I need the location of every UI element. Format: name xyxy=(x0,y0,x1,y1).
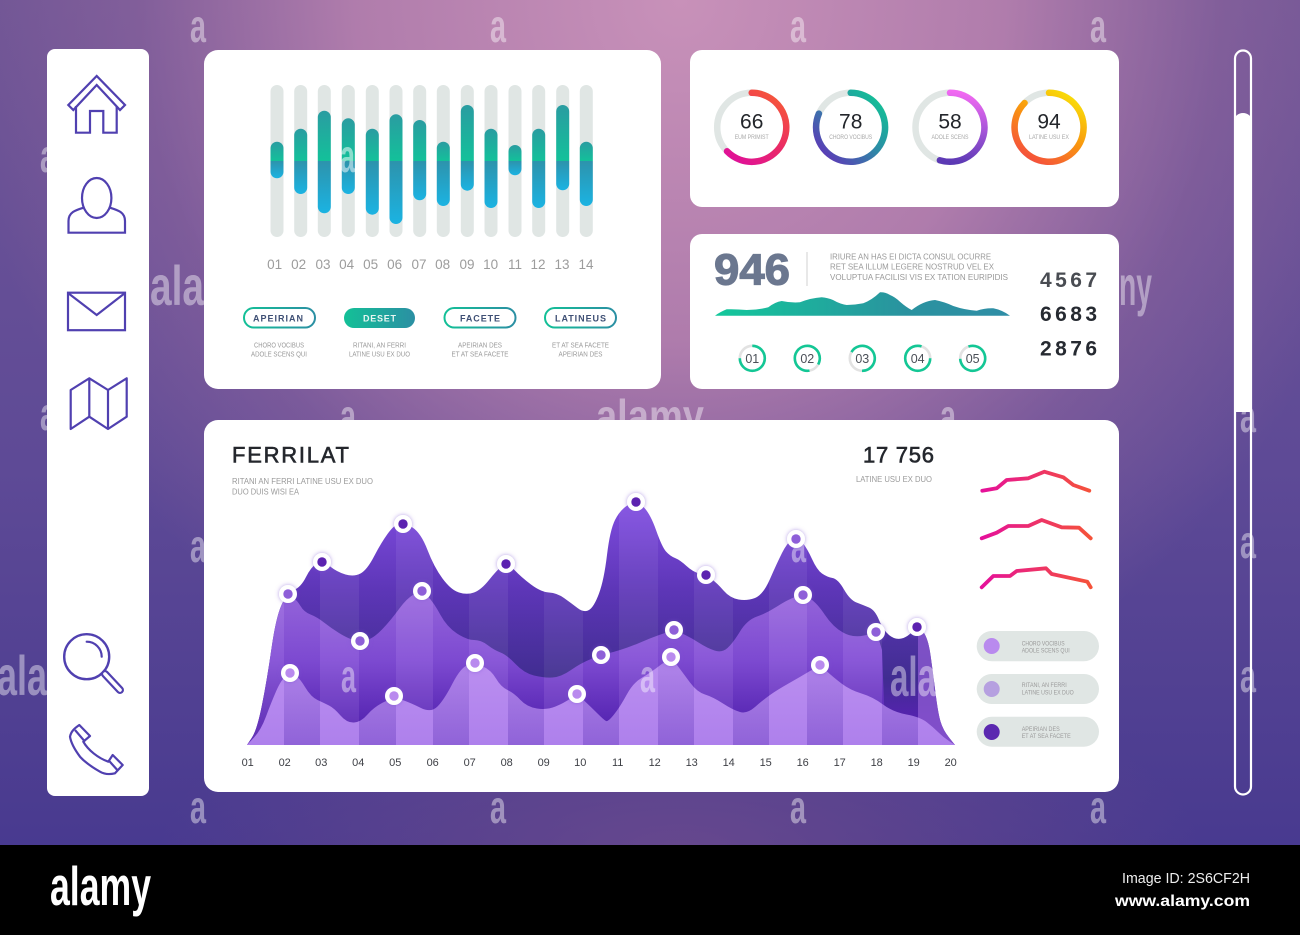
data points middle series xyxy=(279,582,885,664)
icon: user xyxy=(68,178,125,233)
divider xyxy=(806,252,808,286)
gauge 78 xyxy=(816,93,885,162)
stock footer bar xyxy=(0,845,1300,935)
bar axis labels: 09 xyxy=(459,257,475,272)
footer image id: Image ID: 2S6CF2H xyxy=(1122,870,1250,887)
bar axis labels: 10 xyxy=(483,257,498,272)
gauge 66: 66 xyxy=(740,110,763,134)
background watermarks: a xyxy=(490,0,506,52)
background watermarks: a xyxy=(940,390,956,442)
scrollbar xyxy=(1234,50,1252,794)
gauge 58: ADOLE SCENS xyxy=(932,135,968,141)
filter buttons: DESET xyxy=(363,314,396,324)
heading description xyxy=(232,476,373,496)
filter buttons: LATINEUS xyxy=(555,314,606,324)
chart x axis labels: 17 xyxy=(834,757,846,769)
button captions: ADOLE SCENS QUI xyxy=(251,352,307,358)
big number 946: 946 xyxy=(714,246,790,294)
bar axis labels: 02 xyxy=(291,257,306,272)
side numbers xyxy=(1040,269,1097,360)
panel: donut gauges xyxy=(690,50,1119,207)
bar axis labels: 05 xyxy=(363,257,378,272)
description text: RET SEA ILLUM LEGERE NOSTRUD VEL EX xyxy=(830,262,994,272)
bar watermark: a xyxy=(340,130,355,182)
chart x axis labels: 20 xyxy=(945,757,957,769)
background watermarks: a xyxy=(1090,0,1106,52)
background watermarks: a xyxy=(190,781,206,833)
gauge 66: EUM PRIMIST xyxy=(735,135,769,141)
gauge 78: 78 xyxy=(839,110,862,134)
bars lower segments xyxy=(270,161,593,224)
chart x axis labels: 11 xyxy=(612,757,623,769)
bar axis labels xyxy=(267,257,594,272)
chart x axis labels: 02 xyxy=(279,757,291,769)
chart x axis labels: 12 xyxy=(649,757,661,769)
side numbers: 4567 xyxy=(1040,269,1097,292)
background watermarks: a xyxy=(1240,516,1256,568)
data points back series xyxy=(313,493,926,636)
chart x axis labels: 03 xyxy=(315,757,327,769)
chart x axis labels: 04 xyxy=(352,757,364,769)
layered area chart xyxy=(247,490,955,745)
chart watermarks: ala xyxy=(890,645,936,708)
legend pills: ADOLE SCENS QUI xyxy=(1022,649,1070,655)
button captions: RITANI, AN FERRI xyxy=(353,342,406,350)
background watermarks: a xyxy=(1090,781,1106,833)
legend pills: CHORO VOCIBUS xyxy=(1022,642,1065,648)
chart x axis labels: 14 xyxy=(723,757,735,769)
sparklines xyxy=(982,472,1091,587)
data points front series xyxy=(281,648,829,705)
button captions: APEIRIAN DES xyxy=(458,342,502,350)
background watermarks: a xyxy=(40,388,56,440)
background watermarks: ny xyxy=(1119,254,1152,317)
panel: stats summary xyxy=(690,234,1119,389)
button captions: LATINE USU EX DUO xyxy=(349,352,410,358)
icon: search xyxy=(64,634,120,690)
button captions: CHORO VOCIBUS xyxy=(254,342,304,350)
background watermarks: a xyxy=(40,130,56,182)
bar axis labels: 08 xyxy=(435,257,450,272)
button captions xyxy=(251,342,609,358)
icon: phone xyxy=(70,725,123,774)
chart x axis labels: 05 xyxy=(389,757,401,769)
gauge 94: LATINE USU EX xyxy=(1029,135,1069,141)
background watermarks: a xyxy=(190,0,206,52)
chart watermarks: a xyxy=(791,520,806,572)
bar axis labels: 06 xyxy=(387,257,402,272)
chart x axis labels: 19 xyxy=(908,757,920,769)
background watermarks: alamy xyxy=(596,390,704,442)
filter buttons: APEIRIAN xyxy=(253,314,303,324)
background watermarks: a xyxy=(790,781,806,833)
legend pills xyxy=(977,631,1099,747)
footer logo: alamy xyxy=(50,855,151,917)
button captions: ET AT SEA FACETE xyxy=(452,352,509,358)
bar tracks xyxy=(270,85,593,237)
ring labels: 04 xyxy=(911,352,925,366)
panel: bar chart xyxy=(204,50,661,389)
description text xyxy=(830,252,1008,282)
bar axis labels: 03 xyxy=(315,257,331,272)
background watermarks: a xyxy=(190,520,206,572)
legend pills: APEIRIAN DES xyxy=(1022,727,1060,733)
chart x axis labels: 01 xyxy=(242,757,254,769)
chart x axis labels: 10 xyxy=(574,757,586,769)
chart x axis labels: 15 xyxy=(760,757,772,769)
total value: 17 756 xyxy=(863,442,934,468)
bar axis labels: 14 xyxy=(578,257,594,272)
heading: FERRILAT xyxy=(232,442,349,468)
background watermarks: a xyxy=(1240,390,1256,442)
chart x axis labels: 13 xyxy=(686,757,698,769)
ring labels xyxy=(745,352,980,366)
background watermarks: a xyxy=(490,781,506,833)
chart watermarks: a xyxy=(341,650,356,702)
ring labels: 05 xyxy=(966,352,980,366)
filter buttons xyxy=(244,308,616,328)
background watermarks: ala xyxy=(150,254,205,317)
panel: area chart xyxy=(204,420,1119,792)
chart x axis labels xyxy=(242,757,957,769)
chart x axis labels: 06 xyxy=(427,757,439,769)
bar axis labels: 01 xyxy=(267,257,282,272)
gauge 94 xyxy=(1014,93,1084,162)
gauge 58: 58 xyxy=(938,110,962,134)
bar axis labels: 12 xyxy=(530,257,546,272)
chart x axis labels: 09 xyxy=(538,757,550,769)
ring labels: 03 xyxy=(855,352,869,366)
heading description: DUO DUIS WISI EA xyxy=(232,486,299,496)
total caption: LATINE USU EX DUO xyxy=(856,474,932,484)
gauge 78: CHORO VOCIBUS xyxy=(829,135,872,141)
bar axis labels: 13 xyxy=(554,257,570,272)
legend pills: LATINE USU EX DUO xyxy=(1022,690,1074,696)
bars upper segments xyxy=(270,105,593,161)
filter buttons: FACETE xyxy=(460,314,500,324)
chart watermarks: a xyxy=(640,650,655,702)
side numbers: 2876 xyxy=(1040,338,1097,360)
legend pills: ET AT SEA FACETE xyxy=(1022,734,1071,740)
bar axis labels: 04 xyxy=(339,257,355,272)
gauge 58 xyxy=(916,93,984,162)
background watermarks: a xyxy=(790,0,806,52)
background watermarks: a xyxy=(1240,650,1256,702)
gauge 94: 94 xyxy=(1037,110,1061,134)
wave area chart xyxy=(715,292,1010,316)
footer url: www.alamy.com xyxy=(1114,893,1250,910)
chart x axis labels: 18 xyxy=(871,757,883,769)
chart x axis labels: 07 xyxy=(464,757,476,769)
ring labels: 01 xyxy=(745,352,759,366)
description text: VOLUPTUA FACILISI VIS EX TATION EURIPIDIS xyxy=(830,272,1008,282)
chart x axis labels: 16 xyxy=(797,757,809,769)
icon: mail xyxy=(68,293,125,330)
numbered rings xyxy=(740,341,989,375)
icon: map xyxy=(71,378,127,429)
description text: IRIURE AN HAS EI DICTA CONSUL OCURRE xyxy=(830,252,991,262)
background watermarks: a xyxy=(340,390,356,442)
legend pills: RITANI, AN FERRI xyxy=(1022,683,1067,689)
heading description: RITANI AN FERRI LATINE USU EX DUO xyxy=(232,476,373,486)
bar axis labels: 11 xyxy=(508,257,522,272)
bar axis labels: 07 xyxy=(411,257,427,272)
ring labels: 02 xyxy=(800,352,814,366)
icon: home xyxy=(68,76,125,133)
gauge 66 xyxy=(717,93,786,162)
button captions: ET AT SEA FACETE xyxy=(552,342,609,350)
side numbers: 6683 xyxy=(1040,303,1097,326)
button captions: APEIRIAN DES xyxy=(558,352,603,358)
chart watermarks xyxy=(341,520,936,708)
chart x axis labels: 08 xyxy=(501,757,513,769)
sidebar navigation panel xyxy=(47,49,149,796)
